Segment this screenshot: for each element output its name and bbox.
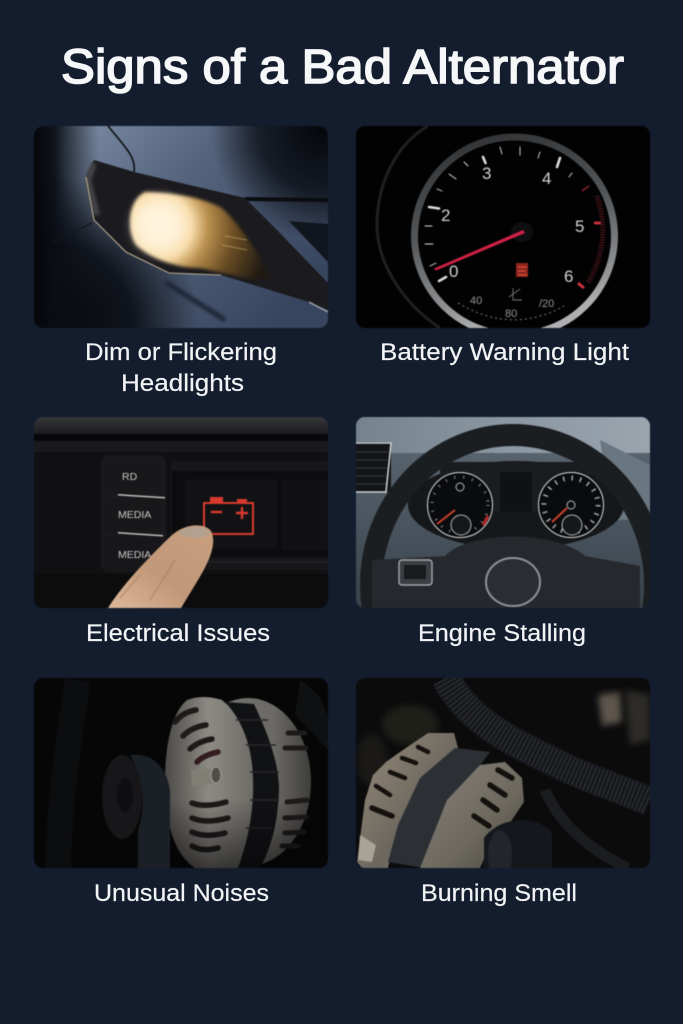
photo: alternator with pulley xyxy=(34,678,328,868)
caption xyxy=(85,339,277,397)
panel: burning smell xyxy=(356,678,650,907)
alternator body xyxy=(160,695,315,868)
icon: battery warning xyxy=(204,497,253,534)
panel: battery warning light xyxy=(356,126,650,366)
finger xyxy=(108,525,213,608)
pulley and belt xyxy=(102,755,170,868)
photo: tachometer gauge: 3 xyxy=(482,164,491,183)
caption: Burning Smell xyxy=(421,880,577,907)
caption: Dim or Flickering xyxy=(85,339,277,366)
photo: finger pressing dashboard button xyxy=(34,416,328,609)
steering wheel xyxy=(371,435,655,735)
photo: tachometer gauge: 40 xyxy=(470,295,482,307)
gauge: right xyxy=(538,472,604,538)
wiring hose xyxy=(446,678,650,868)
caption: Unusual Noises xyxy=(94,880,269,907)
air vent xyxy=(356,442,391,492)
photo: tachometer gauge: 6 xyxy=(564,267,573,286)
caption: Headlights xyxy=(121,370,244,397)
photo: tachometer gauge: 2 xyxy=(441,206,450,225)
photo: tachometer gauge: 4 xyxy=(542,169,551,188)
photo: tachometer gauge: 0 xyxy=(449,262,458,281)
photo: car headlight xyxy=(34,125,329,328)
photo: finger pressing dashboard button: MEDIA xyxy=(118,549,151,561)
caption: Battery Warning Light xyxy=(380,339,629,366)
photo: tachometer gauge xyxy=(356,126,650,329)
photo: steering wheel and dashboard xyxy=(355,416,651,608)
alternator xyxy=(357,733,552,880)
caption: Engine Stalling xyxy=(418,620,586,647)
photo: tachometer gauge: 5 xyxy=(575,217,584,236)
caption: Electrical Issues xyxy=(86,620,270,647)
photo: tachometer gauge: 80 xyxy=(505,308,517,320)
gauge: left xyxy=(428,472,492,538)
panel: electrical issues xyxy=(34,416,328,647)
cooling slots xyxy=(175,710,307,850)
photo: finger pressing dashboard button: MEDIA xyxy=(118,509,151,521)
title: Signs of a Bad Alternator xyxy=(61,41,624,94)
photo: tachometer gauge: /20 xyxy=(539,298,554,310)
photo: finger pressing dashboard button: RD xyxy=(122,471,138,483)
panel: unusual noises xyxy=(34,678,328,907)
photo: alternator and wiring loom xyxy=(356,678,650,868)
panel: engine stalling xyxy=(355,416,651,647)
panel: dim or flickering headlights xyxy=(34,125,329,397)
